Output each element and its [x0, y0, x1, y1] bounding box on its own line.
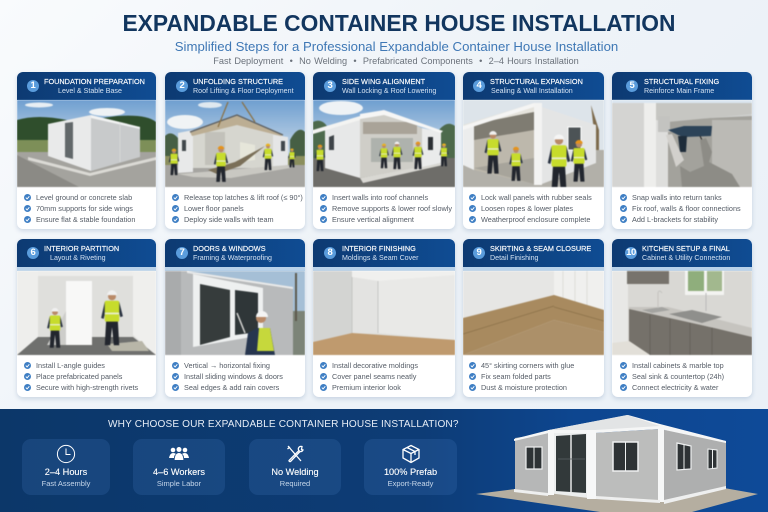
panel: step 7 doors and windows: [165, 239, 305, 397]
step 2 checklist: [172, 193, 303, 224]
step 10 header: 10: [626, 247, 636, 258]
step 10 checklist: Connect electricity & water: [632, 383, 718, 392]
step 4 header: Sealing & Wall Installation: [491, 87, 573, 95]
step 3 header: [313, 72, 455, 100]
subtitle: Simplified Steps for a Professional Expandable Container House Installation: [175, 39, 618, 54]
step 3 checklist: Ensure vertical alignment: [332, 215, 414, 224]
icon: workers group: [169, 447, 189, 460]
stat: no welding: [249, 439, 341, 495]
step 6 header: Layout & Riveting: [50, 254, 106, 262]
step 9 header: 9: [477, 247, 481, 258]
header strip: [463, 267, 604, 271]
step 7 checklist: Install sliding windows & doors: [184, 372, 283, 381]
step 8 checklist: Premium interior look: [332, 383, 401, 392]
panel: step 4 structural expansion: [463, 72, 604, 229]
photo: side wings: [313, 100, 455, 188]
step 5 header: 5: [630, 80, 634, 91]
step 8 checklist: Install decorative moldings: [332, 361, 418, 370]
step 1 checklist: Level ground or concrete slab: [36, 193, 132, 202]
step 9 checklist: 45° skirting corners with glue: [481, 361, 574, 370]
stat: export ready: 100% Prefab: [384, 467, 437, 477]
step 7 header: 7: [180, 247, 184, 258]
photo: wood skirting: [463, 270, 604, 356]
step 6 header: 6: [31, 247, 35, 258]
stat: no welding: No Welding: [271, 467, 319, 477]
step 7 header: DOORS & WINDOWS: [193, 244, 266, 253]
step 4 checklist: [469, 193, 592, 224]
title: EXPANDABLE CONTAINER HOUSE INSTALLATION: [122, 10, 676, 36]
footer band: [0, 409, 768, 512]
stat: fast assembly: [22, 439, 110, 495]
step 10 checklist: Install cabinets & marble top: [632, 361, 724, 370]
photo: container on concrete base: [17, 100, 156, 188]
step 1 checklist: [24, 193, 135, 224]
step 10 header: [612, 239, 752, 267]
step 3 header: Wall Locking & Roof Lowering: [342, 87, 436, 95]
step 9 header: Detail Finishing: [490, 254, 538, 262]
step 4 checklist: Weatherproof enclosure complete: [481, 215, 590, 224]
step 5 header: Reinforce Main Frame: [644, 87, 714, 95]
step 5 checklist: Snap walls into return tanks: [632, 193, 722, 202]
step 6 checklist: [24, 361, 138, 392]
panel: step 3 side wing alignment: [313, 72, 455, 229]
stat: no welding: Required: [280, 479, 310, 488]
step 3 checklist: [320, 193, 452, 224]
panel: step 2 unfolding structure: [165, 72, 305, 229]
stat: simple labor: 4–6 Workers: [153, 467, 205, 477]
step 4 header: [463, 72, 604, 100]
step 6 header: [17, 239, 156, 267]
step 7 checklist: Seal edges & add rain covers: [184, 383, 279, 392]
step 6 header: INTERIOR PARTITION: [44, 244, 119, 253]
header strip: [17, 267, 156, 271]
step 9 header: SKIRTING & SEAM CLOSURE: [490, 244, 591, 253]
step 8 checklist: [320, 361, 418, 392]
panel: step 6 interior partition: [17, 239, 156, 397]
step 7 checklist: [172, 361, 283, 392]
step 10 checklist: Seal sink & countertop (24h): [632, 372, 724, 381]
panel: step 10 kitchen setup: [612, 239, 752, 397]
step 2 header: Roof Lifting & Floor Deployment: [193, 87, 294, 95]
photo: workers sealing walls: [463, 99, 604, 188]
step 8 header: Moldings & Seam Cover: [342, 254, 418, 262]
step 5 checklist: Fix roof, walls & floor connections: [632, 204, 741, 213]
panel: step 8 interior finishing: [313, 239, 455, 397]
step 8 header: INTERIOR FINISHING: [342, 244, 416, 253]
step 10 checklist: [620, 361, 724, 392]
step 2 header: UNFOLDING STRUCTURE: [193, 77, 283, 86]
photo: window installation: [165, 270, 305, 356]
step 6 checklist: Secure with high-strength rivets: [36, 383, 138, 392]
step 2 header: [165, 72, 305, 100]
step 4 header: 4: [477, 80, 481, 91]
step 8 header: [313, 239, 455, 267]
step 1 header: FOUNDATION PREPARATION: [44, 77, 145, 86]
step 9 checklist: Fix seam folded parts: [481, 372, 551, 381]
photo: drill on frame: [612, 99, 752, 188]
stat: export ready: [364, 439, 457, 495]
step 4 checklist: Loosen ropes & lower plates: [481, 204, 573, 213]
step 5 checklist: Add L-brackets for stability: [632, 215, 718, 224]
step 6 checklist: Place prefabricated panels: [36, 372, 122, 381]
icon: prefab box: [402, 444, 420, 464]
step 3 checklist: Insert walls into roof channels: [332, 193, 428, 202]
panel: step 1 foundation preparation: [17, 72, 156, 229]
step 3 header: SIDE WING ALIGNMENT: [342, 77, 425, 86]
step 8 header: 8: [328, 247, 332, 258]
stat: fast assembly: 2–4 Hours: [45, 467, 87, 477]
stat: simple labor: [133, 439, 225, 495]
step 6 checklist: Install L-angle guides: [36, 361, 105, 370]
header strip: [612, 267, 752, 271]
photo: kitchen: [612, 270, 752, 356]
step 5 header: STRUCTURAL FIXING: [644, 77, 719, 86]
step 2 checklist: Deploy side walls with team: [184, 215, 274, 224]
illustration: expandable container house: [476, 415, 758, 512]
stat: simple labor: Simple Labor: [157, 479, 201, 488]
stat: export ready: Export-Ready: [388, 479, 433, 488]
step 1 header: Level & Stable Base: [58, 87, 122, 95]
photo: roof lifting: [165, 100, 305, 188]
step 1 header: 1: [31, 80, 35, 91]
step 10 header: Cabinet & Utility Connection: [642, 254, 730, 262]
step 7 checklist: Vertical → horizontal fixing: [184, 361, 270, 370]
step 1 header: [17, 72, 156, 100]
step 1 checklist: Ensure flat & stable foundation: [36, 215, 135, 224]
step 9 checklist: [469, 361, 574, 392]
footer heading: WHY CHOOSE OUR EXPANDABLE CONTAINER HOUSE INSTALLATION?: [108, 419, 459, 430]
step 9 header: [463, 239, 604, 267]
step 2 header: 2: [180, 80, 184, 91]
step 5 header: [612, 72, 752, 100]
panel: step 5 structural fixing: [612, 72, 752, 229]
step 7 header: [165, 239, 305, 267]
step 5 checklist: [620, 193, 741, 224]
step 4 checklist: Lock wall panels with rubber seals: [481, 193, 592, 202]
step 4 header: STRUCTURAL EXPANSION: [490, 77, 583, 86]
stat: fast assembly: Fast Assembly: [42, 479, 90, 488]
icon: crossed tools: [287, 446, 304, 462]
photo: finished interior: [313, 270, 455, 356]
step 7 header: Framing & Waterproofing: [193, 254, 272, 262]
step 1 checklist: 70mm supports for side wings: [36, 204, 133, 213]
step 2 checklist: Lower floor panels: [184, 204, 244, 213]
step 3 header: 3: [328, 80, 332, 91]
step 2 checklist: Release top latches & lift roof (≤ 90°): [184, 193, 303, 202]
step 10 header: KITCHEN SETUP & FINAL: [642, 244, 730, 253]
photo: partition panels: [17, 270, 156, 356]
header strip: [165, 267, 305, 271]
icon: clock: [56, 444, 76, 464]
feature tagline: Fast Deployment • No Welding • Prefabricated Components • 2–4 Hours Installation: [213, 56, 579, 66]
header strip: [313, 267, 455, 271]
step 9 checklist: Dust & moisture protection: [481, 383, 567, 392]
panel: step 9 skirting and seam closure: [463, 239, 604, 397]
step 8 checklist: Cover panel seams neatly: [332, 372, 416, 381]
step 3 checklist: Remove supports & lower roof slowly: [332, 204, 452, 213]
